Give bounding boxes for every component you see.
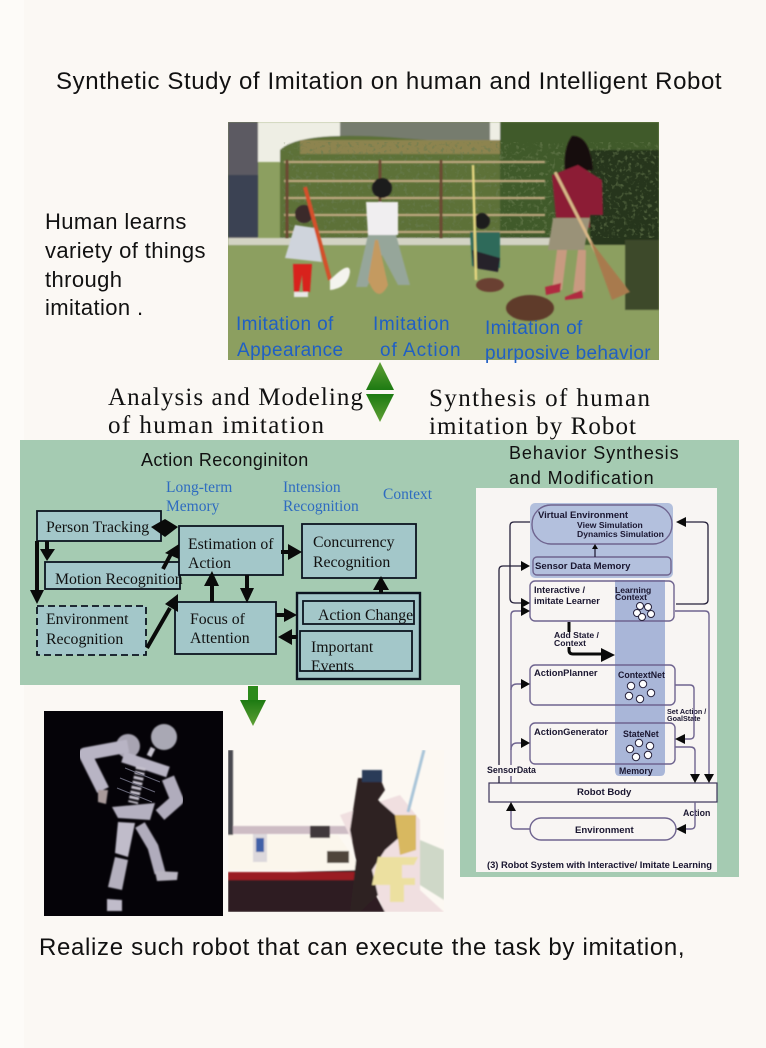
small child: [295, 205, 313, 223]
label: long-term memory: Long-term: [166, 479, 232, 496]
heading: synthesis: Synthesis of human: [429, 385, 650, 412]
closing statement: Realize such robot that can execute the task by imitation,: [39, 934, 685, 961]
boy: [372, 178, 392, 198]
arrow: focus to action change: [276, 608, 297, 622]
woman: [565, 136, 593, 172]
sensor data memory: [533, 557, 671, 575]
box: estimation of action: Action: [188, 555, 231, 572]
panel: action recognition: [30, 450, 433, 679]
action generator: [530, 723, 675, 776]
shaded memory column: [615, 580, 665, 776]
label: intension recognition: Intension: [283, 479, 341, 496]
text block: human learns: [45, 209, 206, 320]
arrow: memory to virtual environment: [592, 544, 598, 557]
crouching child: [474, 213, 490, 229]
box: focus of attention: Focus of: [190, 611, 246, 628]
box: motion recognition: Motion Recognition: [55, 571, 183, 588]
arrow: person tracking to estimation: [151, 519, 178, 537]
label: set action: GoalState: [667, 714, 701, 723]
arrow: estimation to concurrency: [281, 544, 302, 560]
arrow: add state / context: Context: [554, 638, 586, 648]
box: person tracking: [37, 511, 161, 541]
box: environment recognition: Recognition: [46, 631, 123, 648]
virtual environment: Virtual Environment: [538, 510, 629, 521]
text block: human learns: variety of things: [45, 238, 206, 263]
virtual environment: View Simulation: [577, 520, 643, 530]
arrow: environment to focus: [147, 594, 178, 648]
box: action change and important events: Action Change: [318, 607, 413, 624]
label: set action: [667, 707, 706, 723]
label: intension recognition: Recognition: [283, 498, 359, 515]
label: long-term memory: [166, 479, 232, 515]
label: intension recognition: [283, 479, 359, 515]
environment: Environment: [575, 825, 634, 836]
arrow: important events to focus: [278, 629, 297, 645]
title: Synthetic Study of Imitation on human and Intelligent Robot: [56, 68, 722, 95]
interactive learner: imitate Learner: [534, 596, 600, 606]
action planner: ContextNet: [618, 670, 665, 680]
box: person tracking: Person Tracking: [46, 519, 149, 536]
label: long-term memory: Memory: [166, 498, 220, 515]
sensor data memory: Sensor Data Memory: [535, 561, 631, 572]
photo captions: purposive behavior: [485, 343, 651, 364]
arrow: person tracking to motion: [40, 541, 55, 561]
interactive learner: [530, 581, 674, 621]
action generator: StateNet: [623, 729, 659, 739]
photo captions: Appearance: [237, 340, 343, 361]
connector lines: [499, 517, 714, 834]
panel: system diagram background: [476, 488, 717, 872]
interactive learner: Learning: [615, 585, 651, 595]
environment: [530, 818, 676, 840]
box: estimation of action: [179, 526, 283, 575]
arrow: person tracking to environment: [30, 541, 44, 604]
panel: green background: [20, 440, 739, 877]
panel: behavior synthesis: [476, 443, 717, 872]
photo captions: Imitation of: [485, 318, 583, 339]
foliage texture: [282, 142, 659, 238]
heading: synthesis: imitation by Robot: [429, 413, 636, 440]
action planner: ActionPlanner: [534, 667, 598, 678]
arrow: motion to estimation: [163, 544, 179, 569]
text block: human learns: Human learns: [45, 209, 187, 234]
double arrow: green: [366, 362, 394, 422]
label: sensor data: SensorData: [487, 765, 536, 775]
photo: family sweeping the garden: [228, 122, 659, 360]
heading: behavior synthesis: Behavior Synthesis: [509, 443, 679, 463]
photo: simulated humanoid robot: [44, 711, 223, 916]
arrow: add state / context: [554, 622, 615, 662]
virtual environment: [532, 505, 672, 544]
box: action change and important events: Events: [311, 658, 354, 675]
heading: behavior synthesis: [509, 443, 679, 488]
leaf pile: [506, 295, 554, 321]
action generator: Memory: [619, 766, 653, 776]
box: environment recognition: Environment: [46, 611, 129, 628]
heading: synthesis: [429, 385, 650, 440]
box: action change and important events: Important: [311, 639, 374, 656]
diagram: robot system: [487, 503, 717, 870]
box: focus of attention: [175, 602, 276, 654]
arrow: focus to estimation: [204, 571, 219, 602]
photo captions: of Action: [380, 340, 461, 361]
arrow: estimation to focus: [240, 575, 254, 603]
label: context: Context: [383, 486, 433, 503]
box: focus of attention: Attention: [190, 630, 250, 647]
arrow: events to concurrency: [373, 576, 389, 593]
box: concurrency recognition: Concurrency: [313, 534, 395, 551]
action generator: ActionGenerator: [534, 726, 608, 737]
text block: human learns: through: [45, 267, 122, 292]
heading: behavior synthesis: and Modification: [509, 468, 654, 488]
box: concurrency recognition: Recognition: [313, 554, 390, 571]
box: estimation of action: Estimation of: [188, 536, 274, 553]
photo: robot at table: [228, 750, 444, 912]
robot body: Robot Body: [577, 787, 632, 798]
interactive learner: Interactive /: [534, 585, 586, 595]
shaded virtual environment: [530, 503, 673, 578]
heading: action recognition: Action Reconginiton: [141, 450, 309, 470]
photo captions: [236, 314, 651, 364]
heading: analysis and modeling: of human imitation: [108, 412, 324, 439]
box: environment recognition: [37, 606, 146, 655]
label: set action: Set Action /: [667, 707, 706, 716]
photo captions: Imitation: [373, 314, 450, 335]
heading: analysis and modeling: Analysis and Modeling: [108, 384, 364, 411]
interactive learner: Context: [615, 592, 647, 602]
robot body: [489, 783, 717, 802]
box: motion recognition: [45, 562, 183, 589]
box: concurrency recognition: [302, 524, 416, 578]
arrow: down to robots: [240, 686, 266, 726]
virtual environment: Dynamics Simulation: [577, 529, 664, 539]
caption: (3) Robot System with Interactive/ Imitate Learning: [487, 859, 712, 870]
label: action: Action: [683, 808, 710, 818]
arrow: add state / context: Add State /: [554, 630, 599, 640]
heading: analysis and modeling: [108, 384, 364, 439]
photo captions: Imitation of: [236, 314, 334, 335]
action planner: [530, 665, 675, 705]
box: action change and important events: [297, 593, 420, 679]
text block: human learns: imitation .: [45, 295, 144, 320]
